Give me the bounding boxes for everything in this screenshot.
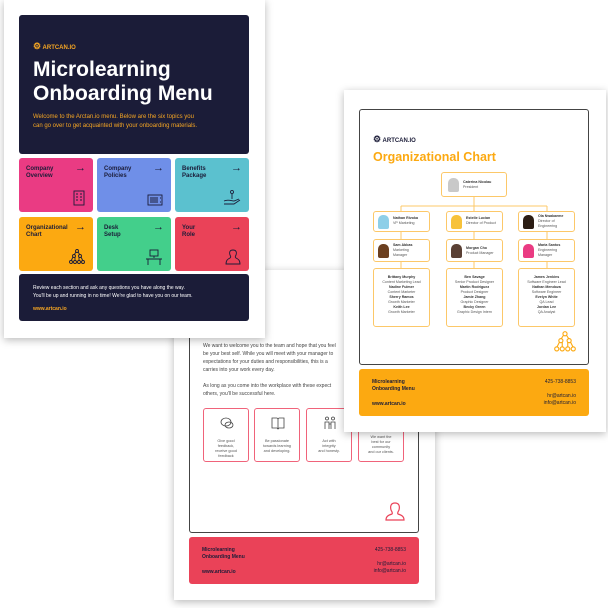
footer panel: You'll be up and running in no time! We're glad to have you on our team. [33, 293, 193, 299]
tile: benefits [175, 158, 249, 212]
text: Act with [322, 439, 336, 443]
team lists: Sherry Ramos [389, 295, 414, 299]
icon: person outline [385, 502, 405, 521]
footer: red [189, 537, 419, 584]
tile: org chart: → [75, 221, 86, 233]
body text: others, you'll be successful here. [203, 391, 275, 397]
org chart: Director of Product [466, 221, 496, 225]
value cards: Give good [217, 439, 235, 443]
tile: your role [175, 217, 249, 271]
tile: company overview: Company [26, 166, 53, 172]
text: Be passionate [265, 439, 289, 443]
team lists: Keith Lee [393, 305, 410, 309]
text: and our clients. [368, 450, 394, 454]
org chart: Ola Nwakaeme [538, 214, 563, 218]
footer: red: Onboarding Menu [202, 554, 245, 560]
title: Organizational Chart [373, 150, 496, 164]
footer panel: Review each section and ask any questions you have along the way. [33, 285, 185, 291]
text: integrity [322, 444, 336, 448]
president: Caterina Nicolau [463, 180, 491, 184]
tile: your role: Role [182, 232, 195, 238]
icon: org chart small [554, 331, 576, 352]
body text: As long as you come into the workplace with these expect [203, 383, 331, 389]
tile: benefits: → [231, 162, 242, 174]
org chart: Ben Savage [464, 275, 485, 279]
tile: org chart: Organizational [26, 225, 68, 231]
tile: company policies: Policies [104, 173, 127, 179]
tile: company overview: → [75, 162, 86, 174]
footer: orange: www.artcan.io [372, 401, 406, 407]
org chart: Engineering [538, 248, 557, 252]
org chart [373, 172, 575, 327]
header panel [19, 15, 249, 154]
team lists [373, 268, 430, 327]
value cards [203, 408, 249, 462]
org chart: Becky Green [464, 305, 485, 309]
logo: ⚙ ARTCAN.IO [33, 41, 76, 51]
title: Onboarding Menu [33, 82, 213, 105]
text: and honesty. [318, 449, 340, 453]
footer: red: Microlearning [202, 547, 235, 553]
org chart: Software Engineer Lead [527, 280, 566, 284]
president: President [463, 185, 478, 189]
tile: company policies: Company [104, 166, 131, 172]
tile: desk setup: Setup [104, 232, 121, 238]
footer: red: 425-738-8853 [375, 547, 406, 553]
footer panel [19, 274, 249, 321]
text: best for our [371, 440, 391, 444]
row 2: Nathan Rivoka [393, 216, 418, 220]
org chart: Engineering [538, 224, 557, 228]
org chart: QA Lead [540, 300, 554, 304]
team lists: Content Marketing Lead [382, 280, 421, 284]
intro: can go over to get acquainted with your onboarding materials. [33, 122, 197, 128]
footer: red: info@artcan.io [374, 568, 406, 574]
text: We want the [370, 435, 392, 439]
org chart: QA Analyst [538, 310, 555, 314]
connectors [400, 197, 548, 268]
org chart: Jamie Zhang [464, 295, 485, 299]
page: organizational chart (front right) [344, 90, 606, 432]
footer: orange: Microlearning [372, 379, 405, 385]
footer: orange [359, 369, 589, 416]
org chart: Jordan Lee [537, 305, 556, 309]
body text: be your best self. While you will meet with your manager to [203, 351, 333, 357]
content frame [189, 270, 419, 533]
text: towards learning [263, 444, 291, 448]
tile: benefits: Benefits [182, 166, 206, 172]
row 3: Manager [393, 253, 407, 257]
value cards: feedback [218, 454, 234, 458]
team lists: Nadine Fulmer [389, 285, 414, 289]
row 2: VP Marketing [393, 221, 415, 225]
text: community [372, 445, 390, 449]
org chart: Manager [538, 253, 552, 257]
org chart: Product Manager [466, 251, 494, 255]
tile: org chart: Chart [26, 232, 42, 238]
org chart: Product Designer [461, 290, 488, 294]
footer panel: www.artcan.io [33, 306, 67, 312]
org chart: Estelle Lucian [466, 216, 490, 220]
org chart: Martin Rodriguez [460, 285, 489, 289]
tile: your role: Your [182, 225, 195, 231]
tile: desk setup: → [153, 221, 164, 233]
footer: red: www.artcan.io [202, 569, 236, 575]
org chart: Graphic Designer [461, 300, 488, 304]
footer: orange: hr@artcan.io [547, 393, 576, 399]
row 2 [373, 211, 430, 232]
footer: orange: info@artcan.io [544, 400, 576, 406]
org chart: Morgan Cho [466, 246, 487, 250]
row 3: Marketing [393, 248, 409, 252]
content frame [359, 109, 589, 365]
logo: ⚙ ARTCAN.IO [373, 134, 416, 144]
page: menu cover (front left) [4, 0, 265, 338]
org chart: Maria Santos [538, 243, 560, 247]
org chart: Director of [538, 219, 555, 223]
title [33, 58, 213, 105]
tile: your role: → [231, 221, 242, 233]
intro [33, 114, 197, 128]
tile: benefits: Package [182, 173, 206, 179]
team lists: Growth Marketer [388, 310, 415, 314]
title: Microlearning [33, 58, 171, 81]
team lists: Content Marketer [388, 290, 415, 294]
org chart: Software Engineer [532, 290, 561, 294]
team lists: Growth Marketer [388, 300, 415, 304]
org chart: Senior Product Designer [455, 280, 494, 284]
tile: desk setup [97, 217, 171, 271]
footer: red: hr@artcan.io [377, 561, 406, 567]
body text: carries into your work every day. [203, 367, 275, 373]
tile: company policies [97, 158, 171, 212]
team lists: Brittany Murphy [388, 275, 415, 279]
intro: Welcome to the Arctan.io menu. Below are the six topics you [33, 114, 194, 120]
row 3: Sam Abbas [393, 243, 412, 247]
value cards: receive good [215, 449, 237, 453]
page: welcome letter (back) [174, 270, 435, 600]
president [441, 172, 507, 197]
tile: company overview [19, 158, 93, 212]
tile: org chart [19, 217, 93, 271]
footer: orange: 425-738-8853 [545, 379, 576, 385]
footer: orange: Onboarding Menu [372, 386, 415, 392]
body text: expectations for your duties and responsibilities, this is a [203, 359, 328, 365]
text: and developing. [264, 449, 290, 453]
org chart: Graphic Design Intern [457, 310, 492, 314]
value cards: feedback, [218, 444, 234, 448]
tile: desk setup: Desk [104, 225, 118, 231]
body text: We want to welcome you to the team and hope that you feel [203, 343, 336, 349]
org chart: Nathan Mendoza [532, 285, 561, 289]
tile: company policies: → [153, 162, 164, 174]
org chart: James Jenkins [534, 275, 559, 279]
body text [203, 343, 336, 397]
tile: company overview: Overview [26, 173, 53, 179]
row 3 [373, 239, 430, 262]
org chart: Evelyn White [535, 295, 558, 299]
